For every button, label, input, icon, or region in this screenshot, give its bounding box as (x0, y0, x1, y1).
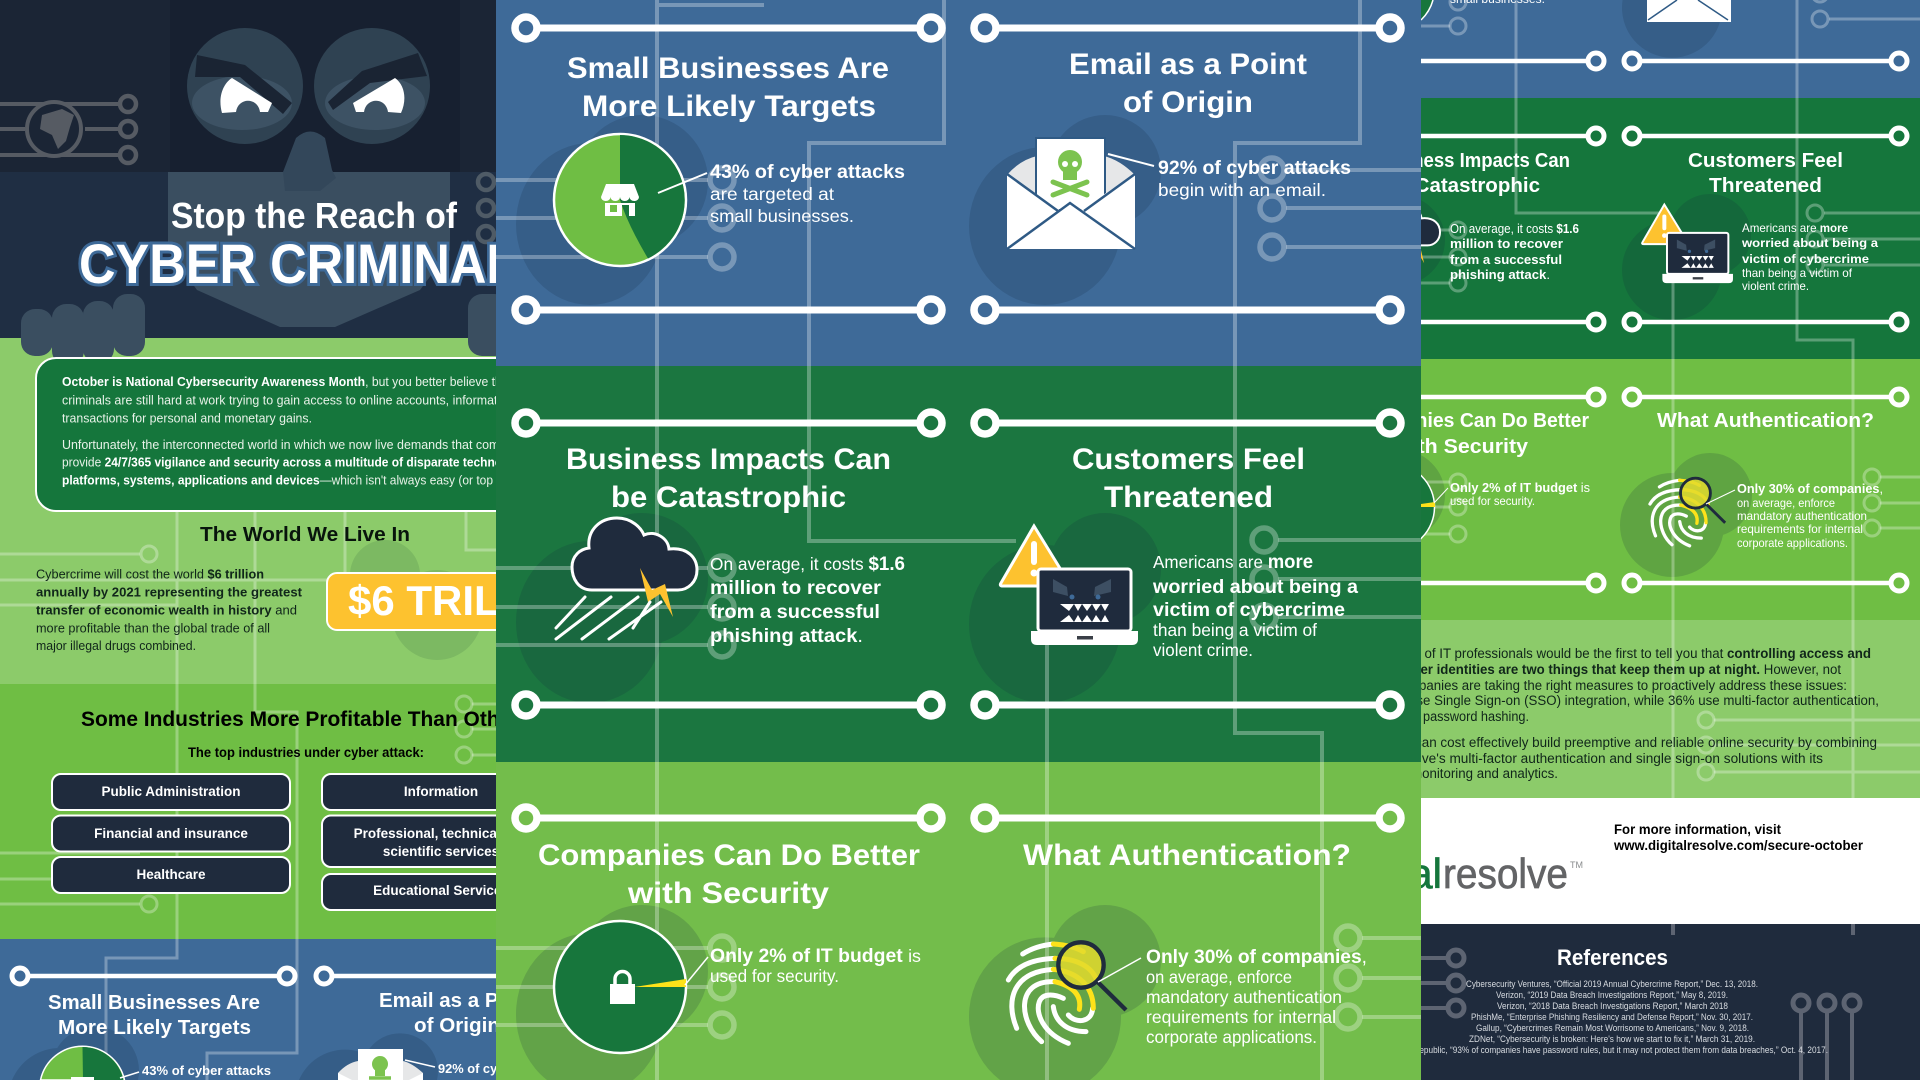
blue section rails and preview cards (10, 966, 496, 1080)
text: access paragraph: Most of IT professionals would be the first to tell you that controlling access and (1392, 646, 1871, 661)
text: customers worried: Americans are more (1153, 552, 1313, 573)
card: customers right: worried about being a (1741, 236, 1878, 250)
heading: companies: Companies Can Do Better (538, 839, 920, 872)
text: 43 percent: are targeted at (710, 184, 834, 204)
industry labels (95, 786, 496, 895)
card: small businesses (554, 52, 905, 266)
industry labels: scientific services (383, 844, 499, 859)
text: 30 percent (1146, 947, 1367, 1047)
callout: six trillion (326, 540, 496, 660)
heading: email: of Origin (1123, 86, 1253, 119)
text: reference list: Verizon, “2018 Data Breach Investigations Report,” March 2018 (1497, 1001, 1728, 1012)
text: 92 percent: begin with an email. (1158, 180, 1326, 200)
light green intro section (0, 338, 496, 684)
card: customers right: than being a victim of (1742, 266, 1853, 280)
blue section (0, 939, 496, 1080)
subheading: top industries: The top industries under cyber attack: (188, 745, 424, 760)
card: authentication right: requirements for internal (1737, 522, 1863, 536)
text: reference list: ZDNet, “Cybersecurity is broken: Here's how we start to fix it,” March 31, 2019. (1469, 1034, 1755, 1045)
text: phishing cost: million to recover (710, 578, 882, 599)
blue section rails and preview cards: More Likely Targets (58, 1017, 251, 1039)
icon: envelope top (338, 1049, 423, 1080)
card: authentication right: corporate applications. (1737, 536, 1848, 550)
card: authentication right: on average, enforce (1737, 496, 1835, 510)
card: business impacts right: phishing attack . (1450, 268, 1550, 282)
heading: small businesses: More Likely Targets (582, 90, 876, 123)
card: companies right: Only 2% of IT budget is (1450, 481, 1590, 495)
card: customers right: violent crime. (1742, 279, 1809, 293)
mid green industries section (0, 684, 496, 939)
text: 92 percent: 92% of cyber attacks (1158, 158, 1351, 179)
text: 30 percent: mandatory authentication (1146, 987, 1342, 1007)
text: cybercrime cost: annually by 2021 representing the greatest (36, 586, 303, 600)
heading: authentication: What Authentication? (1023, 839, 1351, 872)
text: for more information: For more information, visit (1614, 821, 1781, 837)
card: business impacts (556, 443, 905, 647)
heading: the world we live in: The World We Live In (200, 524, 410, 546)
heading: customers: Threatened (1104, 481, 1273, 514)
text: 30 percent: requirements for internal (1146, 1007, 1336, 1027)
card: business impacts right: Business Impacts Can (1372, 150, 1570, 172)
text: 43 percent: 43% of cyber attacks (710, 162, 905, 183)
heading: customers: Customers Feel (1072, 443, 1305, 476)
heading: industries: Some Industries More Profitable Than Others (81, 708, 531, 731)
card: business impacts right: be Catastrophic (1385, 175, 1540, 197)
intro text box: October is National Cybersecurity Awareness Month, but you better believe that (62, 375, 513, 389)
intro text box: Unfortunately, the interconnected world in which we now live demands that companies (62, 438, 536, 452)
intro text box (35, 357, 496, 512)
blue section rails and preview cards: 43% of cyber attacks (142, 1064, 271, 1078)
rails: white connector lines (1421, 53, 1907, 591)
blue section rails and preview cards: of Origin (414, 1015, 500, 1037)
text: customers worried: worried about being a (1152, 577, 1358, 598)
text: access paragraph: monitoring and analytics. (1411, 766, 1558, 781)
industry labels: Financial and insurance (94, 826, 248, 841)
text: customers worried (1152, 552, 1358, 660)
chart: 2 percent budget (554, 921, 708, 1053)
card: business impacts right (1347, 150, 1579, 282)
intro text box: transactions for personal and monetary gains. (62, 412, 312, 426)
text: 30 percent: corporate applications. (1146, 1027, 1317, 1047)
middle panel: zoomed cards (496, 0, 1421, 1080)
icon: envelope bottom (1647, 0, 1731, 22)
text: phishing cost (710, 554, 905, 647)
row one remainder: pie, text, envelope (1421, 0, 1731, 22)
icon: storm cloud (556, 518, 697, 639)
band backgrounds (1421, 0, 1920, 1080)
title: Stop the Reach of (171, 195, 458, 236)
card: companies (538, 839, 921, 1053)
text: cybercrime cost: Cybercrime will cost the world $6 trillion (36, 568, 264, 582)
text: 30 percent: Only 30% of companies, (1146, 947, 1367, 968)
callout: six trillion: $6 TRILLION (348, 577, 600, 624)
card: authentication right: Only 30% of companies, (1737, 482, 1883, 496)
leader line (1108, 154, 1154, 166)
text: phishing cost: On average, it costs $1.6 (710, 554, 905, 575)
text: access paragraph: companies are taking the right measures to proactively address these issues: (1394, 678, 1847, 693)
heading: small businesses: Small Businesses Are (567, 52, 889, 85)
logo: digital resolve: al (1409, 850, 1442, 897)
intro text box: provide 24/7/365 vigilance and security across a multitude of disparate technologies, (62, 456, 540, 470)
text: reference list (1396, 979, 1828, 1056)
text: customers worried: than being a victim of (1153, 620, 1317, 640)
icon: fingerprint and magnifier (1008, 942, 1141, 1043)
circuit traces right panel (1421, 0, 1920, 924)
card: authentication right (1650, 410, 1883, 550)
icon: warning and laptop (1000, 526, 1138, 645)
icon: globe with circuit traces (0, 96, 136, 163)
band backgrounds (496, 0, 1421, 1080)
text: 43 percent: small businesses. (710, 206, 854, 226)
blobs behind icons (1355, 0, 1752, 577)
industry labels: Professional, technical and (354, 826, 528, 841)
card: customers right (1642, 150, 1878, 293)
heading: email (1069, 48, 1307, 119)
card: business impacts right: On average, it costs $1.6 (1450, 222, 1579, 236)
text: access paragraph: password hashing. (1423, 709, 1529, 724)
text: for more information: www.digitalresolve.com/secure-october (1613, 837, 1864, 853)
heading: business impacts (566, 443, 891, 514)
footer circuit decoration (1421, 924, 1860, 1080)
card: companies right (1348, 410, 1590, 550)
circuit traces middle panel (496, 0, 1421, 1080)
heading: companies (538, 839, 920, 910)
text: 2 percent (710, 946, 921, 986)
blue section rails and preview cards: Email as a Point (379, 990, 536, 1012)
card: business impacts right: million to recover (1450, 237, 1563, 251)
heading: small businesses (567, 52, 889, 123)
logo: digital resolve: TM (1570, 860, 1583, 870)
title (78, 202, 496, 286)
text: 2 percent: Only 2% of IT budget is (710, 946, 921, 967)
text: access paragraph: Resolve's multi-factor authentication and single sign-on solutions with its (1387, 751, 1823, 766)
pie chart: 43 percent (554, 134, 707, 266)
intro text box: criminals are still hard at work trying to gain access to online accounts, information (62, 394, 514, 408)
text: access paragraph: can cost effectively build preemptive and reliable online security by combining (1415, 735, 1877, 750)
industry labels: Educational Services (373, 883, 509, 898)
card: authentication right: mandatory authentication (1737, 509, 1867, 523)
text: reference list: Verizon, “2019 Data Breach Investigations Report,” May 8, 2019. (1496, 990, 1728, 1001)
icon: envelope with skull (1007, 138, 1135, 249)
industry labels: Information (404, 784, 478, 799)
text: 2 percent: used for security. (710, 966, 839, 986)
text: cybercrime cost: more profitable than the global trade of all (36, 622, 270, 636)
text: 30 percent: on average, enforce (1146, 967, 1292, 987)
heading: references: References (1557, 945, 1668, 970)
card: customers right: Americans are more (1742, 221, 1848, 235)
heading: email: Email as a Point (1069, 48, 1307, 81)
logo: digital resolve: resolve (1443, 850, 1568, 897)
rails: white connector lines (515, 17, 1401, 829)
card: companies right: used for security. (1450, 494, 1535, 508)
card: authentication (1008, 839, 1367, 1047)
text: 43 percent (710, 162, 905, 226)
industry labels: Public Administration (101, 784, 241, 799)
card: companies right: with Security (1394, 436, 1529, 458)
text: reference list: Gallup, “Cybercrimes Remain Most Worrisome to Americans,” Nov. 9, 2018. (1476, 1023, 1749, 1034)
card: customers right: Customers Feel (1688, 150, 1843, 172)
text: for more information (1613, 821, 1864, 853)
text: phishing cost: phishing attack . (710, 626, 863, 647)
card: business impacts right: from a successful (1450, 253, 1562, 267)
heading: business impacts: be Catastrophic (611, 481, 846, 514)
hands gripping the edge (21, 294, 496, 358)
title: CYBER CRIMINALS (79, 232, 551, 295)
industry labels: Healthcare (136, 867, 206, 882)
text: reference list: PhishMe, “Enterprise Phishing Resiliency and Defense Report,” Nov. 30, 2017. (1471, 1012, 1753, 1023)
industry buttons (51, 773, 496, 911)
right panel: lower half of infographic (1347, 0, 1920, 1080)
text: cybercrime cost: major illegal drugs combined. (36, 639, 196, 653)
card: companies right: Companies Can Do Better (1350, 410, 1589, 432)
heading: customers (1072, 443, 1305, 514)
text: customers worried: violent crime. (1153, 640, 1253, 660)
left panel: full infographic overview (0, 0, 496, 1080)
text: access paragraph (1387, 646, 1879, 781)
text: access paragraph: user identities are two things that keep them up at night. However, not (1405, 662, 1841, 677)
white footer band (1421, 798, 1920, 924)
blobs behind icons (516, 115, 1161, 1080)
text: access paragraph: use Single Sign-on (SSO) integration, while 36% use multi-factor authentication, (1409, 693, 1879, 708)
text: cybercrime cost (36, 568, 303, 653)
text: reference list: Cybersecurity Ventures, “Official 2019 Annual Cybercrime Report,” Dec. 13, 2018. (1466, 979, 1758, 990)
icon: villain face (168, 28, 450, 327)
card: email (1007, 48, 1351, 249)
circuit traces left panel (0, 505, 496, 1080)
card: authentication right: What Authentication? (1657, 410, 1874, 432)
blue section rails and preview cards: Small Businesses Are (48, 992, 260, 1014)
card: customers right: victim of cybercrime (1742, 252, 1869, 266)
text: cybercrime cost: transfer of economic wealth in history and (36, 604, 297, 618)
hero background (170, 0, 460, 172)
circuit nodes beside hero (478, 174, 494, 242)
text: reference list: TechRepublic, “93% of companies have password rules, but it may not protect them from data breaches,” Oct. 4, 2017. (1396, 1045, 1828, 1056)
heading: business impacts: Business Impacts Can (566, 443, 891, 476)
text: customers worried: victim of cybercrime (1153, 600, 1345, 621)
card: customers (1000, 443, 1358, 660)
intro text box: platforms, systems, applications and devices—which isn't always easy (or top (62, 474, 493, 488)
heading: companies: with Security (627, 877, 829, 910)
text: 92 percent (1158, 158, 1351, 200)
text: phishing cost: from a successful (710, 602, 880, 623)
card: customers right: Threatened (1709, 175, 1822, 197)
blue section rails and preview cards: 92% of cyber attacks (438, 1062, 565, 1076)
